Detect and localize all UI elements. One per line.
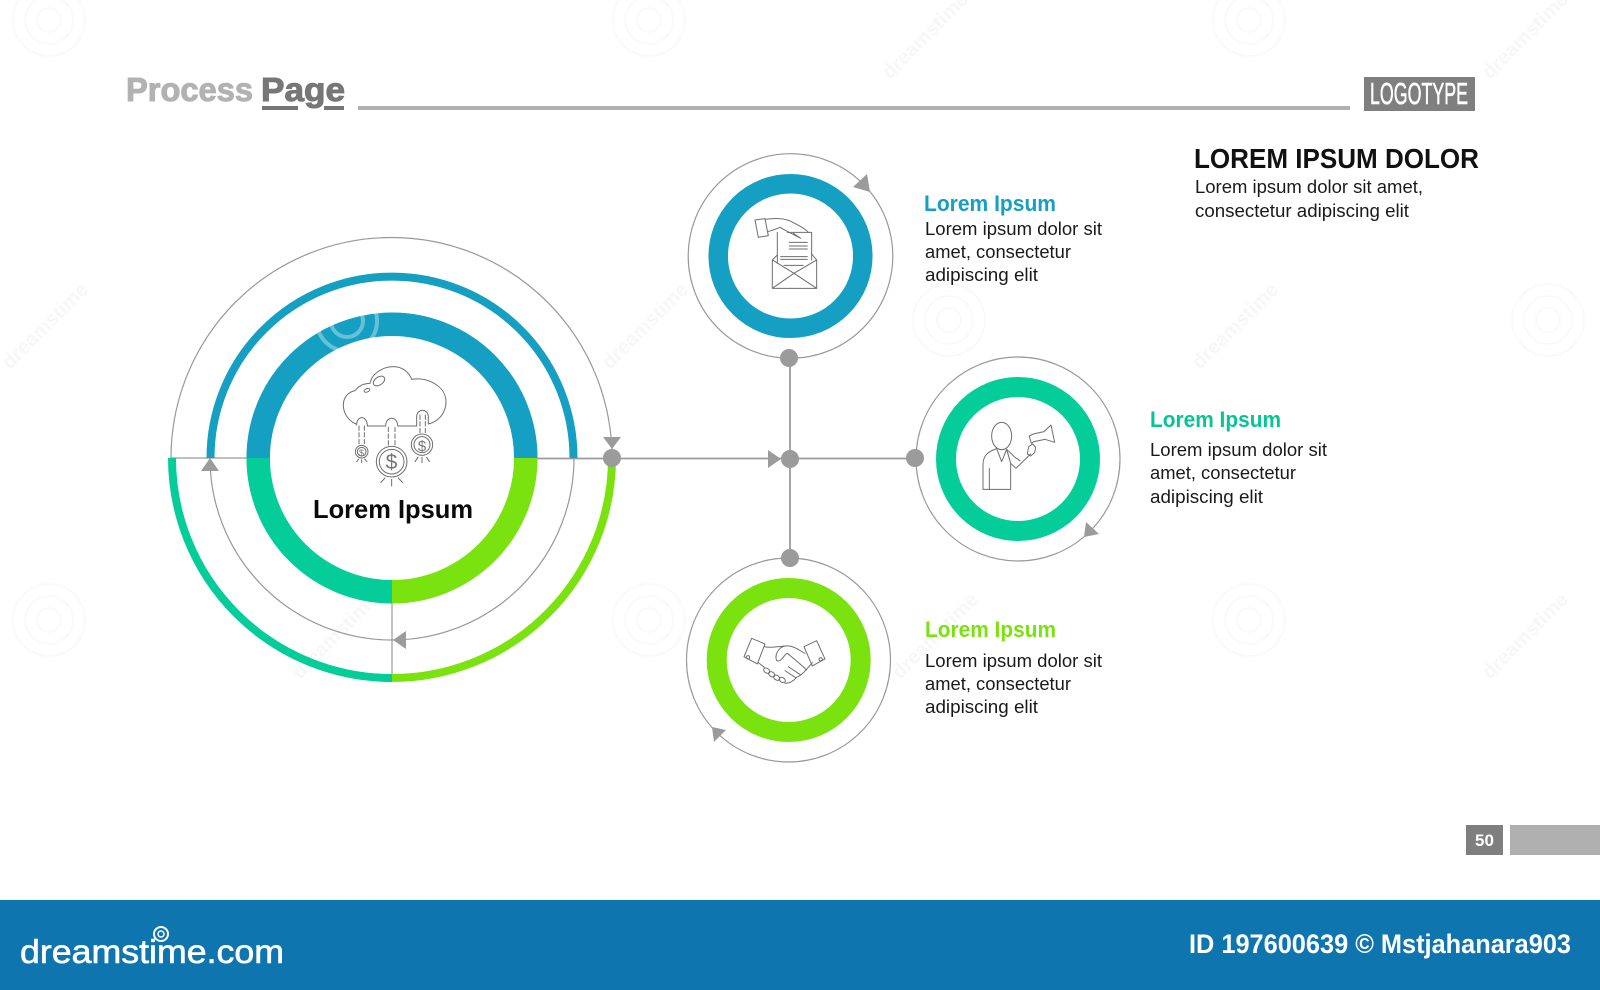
logotype badge: LOGOTYPE <box>1370 76 1468 111</box>
icon: hand with letter <box>755 219 817 288</box>
connection dot <box>780 349 798 367</box>
step 2 label: Lorem Ipsum <box>1150 407 1281 432</box>
step 2 label <box>1150 407 1327 507</box>
junction dot <box>781 450 799 468</box>
arrow: bottom left-pointing <box>393 631 406 649</box>
text: dreamstime <box>0 279 93 374</box>
footer bar <box>0 900 1600 990</box>
step 2 label: Lorem ipsum dolor sit <box>1150 440 1327 460</box>
inner ring: green quarter <box>392 458 526 592</box>
step 1 label: adipiscing elit <box>925 265 1038 285</box>
thin grey cycle lines <box>171 237 612 680</box>
green ring <box>717 588 861 732</box>
page number: 50 <box>1475 831 1494 850</box>
text: dreamstime <box>1188 279 1283 374</box>
title: Process Page <box>126 71 345 110</box>
title: Process Page: Process <box>126 71 253 108</box>
outer ring <box>688 154 893 358</box>
intro text block: Lorem ipsum dolor sit amet, <box>1195 177 1423 197</box>
intro text block <box>1194 143 1479 221</box>
logotype badge <box>1364 76 1475 111</box>
icon: coin dollar signs <box>359 438 427 474</box>
connector lines <box>537 358 915 558</box>
outer ring <box>916 357 1120 561</box>
step 1 label: Lorem Ipsum <box>924 191 1056 216</box>
arrowhead <box>712 727 726 742</box>
icon: coin dollar signs: $ <box>386 451 398 474</box>
arrow: left up <box>201 458 219 471</box>
outer ring <box>686 558 890 762</box>
arrowhead <box>1084 522 1099 537</box>
text: dreamstime <box>888 589 983 684</box>
main circle diagram <box>171 237 621 680</box>
step 3 label: adipiscing elit <box>925 697 1038 717</box>
text: dreamstime <box>288 589 383 684</box>
step 3: green node <box>686 549 890 762</box>
title: Process Page: Page <box>261 71 345 108</box>
step 3 label: amet, consectetur <box>925 674 1071 694</box>
step 3 label <box>925 617 1102 717</box>
inner ring: teal quarter <box>258 458 392 592</box>
footer credit: ID 197600639 © Mstjahanara903 <box>1189 929 1571 959</box>
intro text block: consectetur adipiscing elit <box>1195 201 1409 221</box>
step 2 label: adipiscing elit <box>1150 487 1263 507</box>
teal ring <box>946 387 1090 531</box>
step 1 label: amet, consectetur <box>925 242 1071 262</box>
connection dot <box>906 449 924 467</box>
icon: handshake <box>744 638 825 684</box>
icon: coin dollar signs: $ <box>418 438 427 455</box>
step 2 label: amet, consectetur <box>1150 463 1296 483</box>
step 2: teal node <box>906 357 1120 561</box>
icon: person with megaphone <box>983 422 1055 489</box>
arrow: top arc end <box>603 437 621 449</box>
arrow: horizontal connector head <box>768 450 781 468</box>
node dot <box>603 449 621 467</box>
step 3 label: Lorem Ipsum <box>925 617 1056 642</box>
center label: Lorem Ipsum <box>313 494 473 524</box>
header rule <box>358 106 1350 110</box>
outer green arc <box>392 458 612 678</box>
icon: coin dollar signs: $ <box>359 448 364 458</box>
icon: cloud with coins <box>343 367 446 486</box>
header <box>126 71 1475 111</box>
inner ring: blue half <box>258 324 526 458</box>
blue ring <box>718 184 863 328</box>
step 1: blue node <box>688 154 893 367</box>
page number <box>1466 825 1600 855</box>
outer teal arc <box>172 458 392 678</box>
text: dreamstime <box>1478 589 1573 684</box>
arrowhead <box>853 174 870 192</box>
step 1 label: Lorem ipsum dolor sit <box>925 219 1102 239</box>
step 1 label <box>924 191 1102 285</box>
text: dreamstime <box>598 279 693 374</box>
footer logo: dreamstime.com <box>20 933 284 970</box>
outer blue arc <box>210 277 574 458</box>
intro text block: LOREM IPSUM DOLOR <box>1194 143 1479 174</box>
step 3 label: Lorem ipsum dolor sit <box>925 651 1102 671</box>
connection dot <box>781 549 799 567</box>
